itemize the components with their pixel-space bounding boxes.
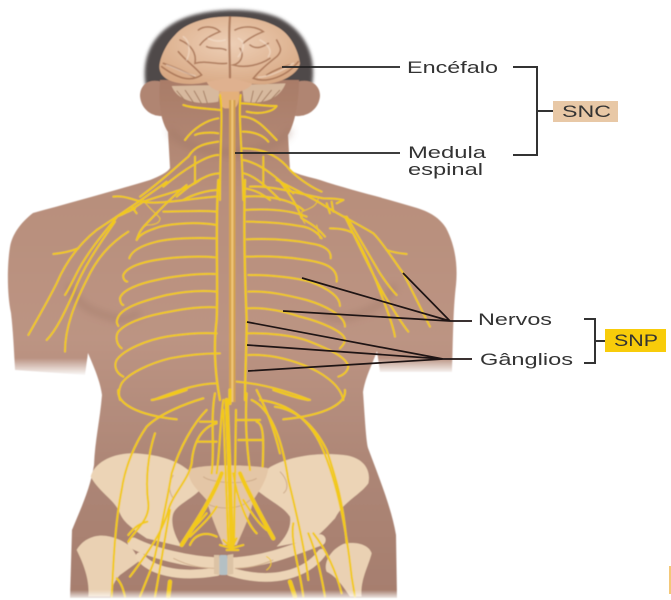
left chest nerves (28, 180, 220, 400)
badge: SNC: SNC (562, 103, 611, 121)
bracket: SNP (584, 319, 605, 363)
cerebellum (172, 83, 286, 103)
badge: SNP: SNP (614, 332, 658, 350)
peripheral nerves (28, 95, 430, 597)
hair (145, 10, 313, 95)
bottom fade (5, 358, 458, 600)
sacrum (188, 465, 268, 545)
label: Encéfalo: Encéfalo (407, 58, 498, 77)
corner mark (669, 566, 671, 594)
label: Nervos: Nervos (478, 310, 552, 329)
bone shading (170, 472, 287, 568)
lower nerves (112, 390, 355, 597)
spinal cord (229, 100, 236, 402)
bracket: SNC (513, 67, 553, 155)
pelvis (77, 453, 372, 597)
human body figure (5, 10, 458, 600)
badge: SNC (553, 101, 618, 122)
femurs (77, 536, 138, 597)
label: Medula espinal: espinal (408, 160, 483, 179)
leader: Encéfalo (282, 66, 400, 68)
sulci (162, 17, 298, 80)
leader: Medula espinal (235, 152, 400, 154)
label: Gânglios: Gânglios (480, 350, 573, 369)
brain (159, 17, 300, 108)
torso and arms (8, 80, 457, 598)
pubic bones (133, 540, 322, 577)
right chest nerves (237, 180, 430, 400)
cerebrum (159, 17, 300, 84)
neck nerves (140, 95, 322, 200)
leader lines (235, 67, 472, 371)
leaders: Nervos (283, 273, 472, 321)
badge: SNP (605, 329, 666, 352)
ears (140, 81, 320, 116)
brain stem (205, 77, 255, 93)
label: Medula espinal: Medula (408, 143, 487, 162)
leaders: Gânglios (247, 322, 472, 371)
pubic symphysis (214, 554, 233, 575)
hip bones (91, 453, 200, 547)
muscle shading (68, 130, 395, 319)
